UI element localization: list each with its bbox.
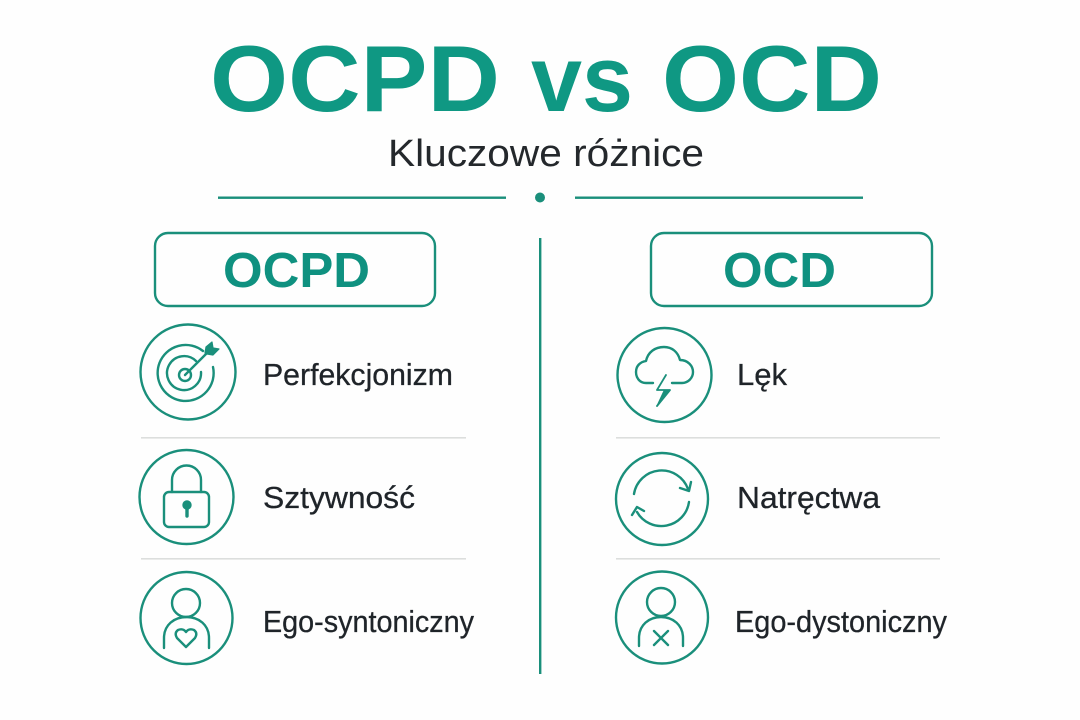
icon: storm cloud (618, 328, 712, 422)
heading badge: OCD (651, 233, 932, 306)
icon: target with arrow (140, 324, 236, 420)
label: Ego-syntoniczny: Ego-syntoniczny (263, 604, 474, 639)
heading badge: OCPD (155, 233, 435, 306)
header divider (218, 192, 863, 202)
icon: cycle arrows (616, 453, 708, 545)
title: OCPD (210, 26, 500, 131)
title (210, 26, 882, 131)
subtitle: Kluczowe różnice (388, 133, 704, 175)
heading badge: OCPD: OCPD (223, 244, 370, 298)
panel: OCD column (616, 233, 947, 664)
panel: OCPD column (140, 233, 474, 664)
label: Lęk: Lęk (737, 357, 787, 392)
title: vs (531, 26, 633, 131)
icon: person with heart (140, 572, 232, 664)
label: Perfekcjonizm: Perfekcjonizm (263, 357, 453, 392)
label: Ego-dystoniczny: Ego-dystoniczny (735, 604, 947, 639)
heading badge: OCD: OCD (723, 244, 836, 298)
vertical column divider (539, 238, 541, 674)
label: Sztywność: Sztywność (263, 480, 415, 515)
title: OCD (662, 26, 882, 131)
icon: padlock (140, 450, 234, 544)
icon: person with X (616, 572, 708, 664)
label: Natręctwa: Natręctwa (737, 480, 881, 515)
